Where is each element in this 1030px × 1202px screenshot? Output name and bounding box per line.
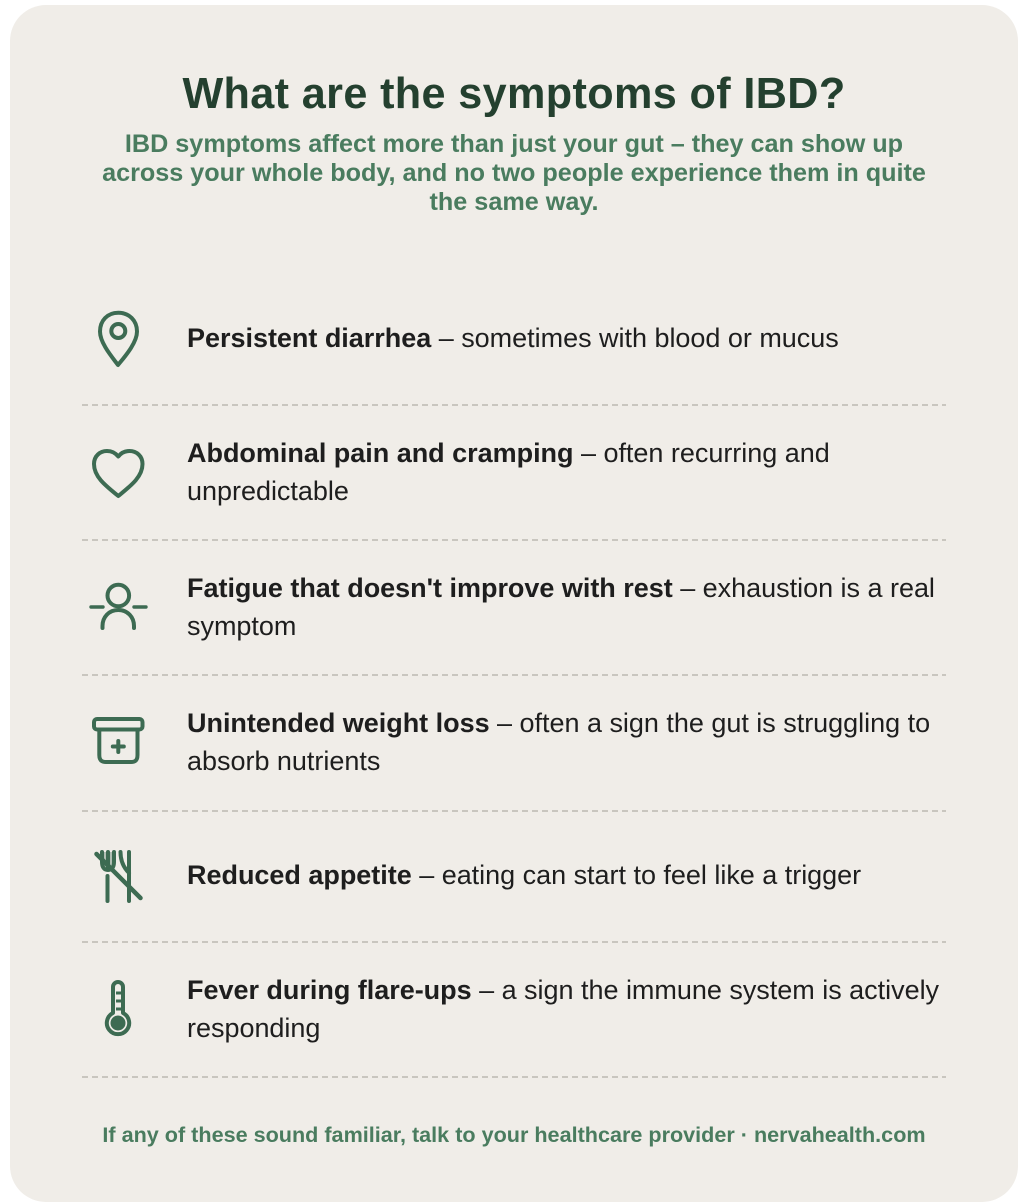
subtitle: IBD symptoms affect more than just your gut – they can show up xyxy=(125,130,903,158)
title: What are the symptoms of IBD? xyxy=(182,70,846,118)
icon: crossed fork and knife xyxy=(96,852,140,901)
symptom: fatigue xyxy=(187,573,935,641)
symptom: weight loss: Unintended weight loss – often a sign the gut is struggling to xyxy=(187,708,930,738)
icon: person with dashes xyxy=(91,585,146,628)
symptom: abdominal pain: Abdominal pain and cramping – often recurring and xyxy=(187,438,830,468)
icon: medicine box xyxy=(94,719,142,762)
symptom: abdominal pain xyxy=(187,438,830,506)
symptom: weight loss: absorb nutrients xyxy=(187,746,380,776)
icon: thermometer xyxy=(107,982,129,1034)
subtitle xyxy=(102,130,926,216)
icon: heart xyxy=(94,451,142,496)
icon: location pin xyxy=(100,313,137,365)
symptom: fatigue: symptom xyxy=(187,611,296,641)
footer: If any of these sound familiar, talk to your healthcare provider · nervahealth.com xyxy=(102,1122,926,1147)
symptom: abdominal pain: unpredictable xyxy=(187,476,349,506)
symptom: persistent diarrhea: Persistent diarrhea – sometimes with blood or mucus xyxy=(187,323,839,353)
symptom: fever: responding xyxy=(187,1013,320,1043)
symptom: fever: Fever during flare-ups – a sign the immune system is actively xyxy=(187,975,939,1005)
subtitle: the same way. xyxy=(430,188,598,216)
symptom: weight loss xyxy=(187,708,930,776)
symptom: fever xyxy=(187,975,939,1043)
subtitle: across your whole body, and no two people experience them in quite xyxy=(102,159,926,187)
symptom: fatigue: Fatigue that doesn't improve with rest – exhaustion is a real xyxy=(187,573,935,603)
symptom: reduced appetite: Reduced appetite – eating can start to feel like a trigger xyxy=(187,860,861,890)
